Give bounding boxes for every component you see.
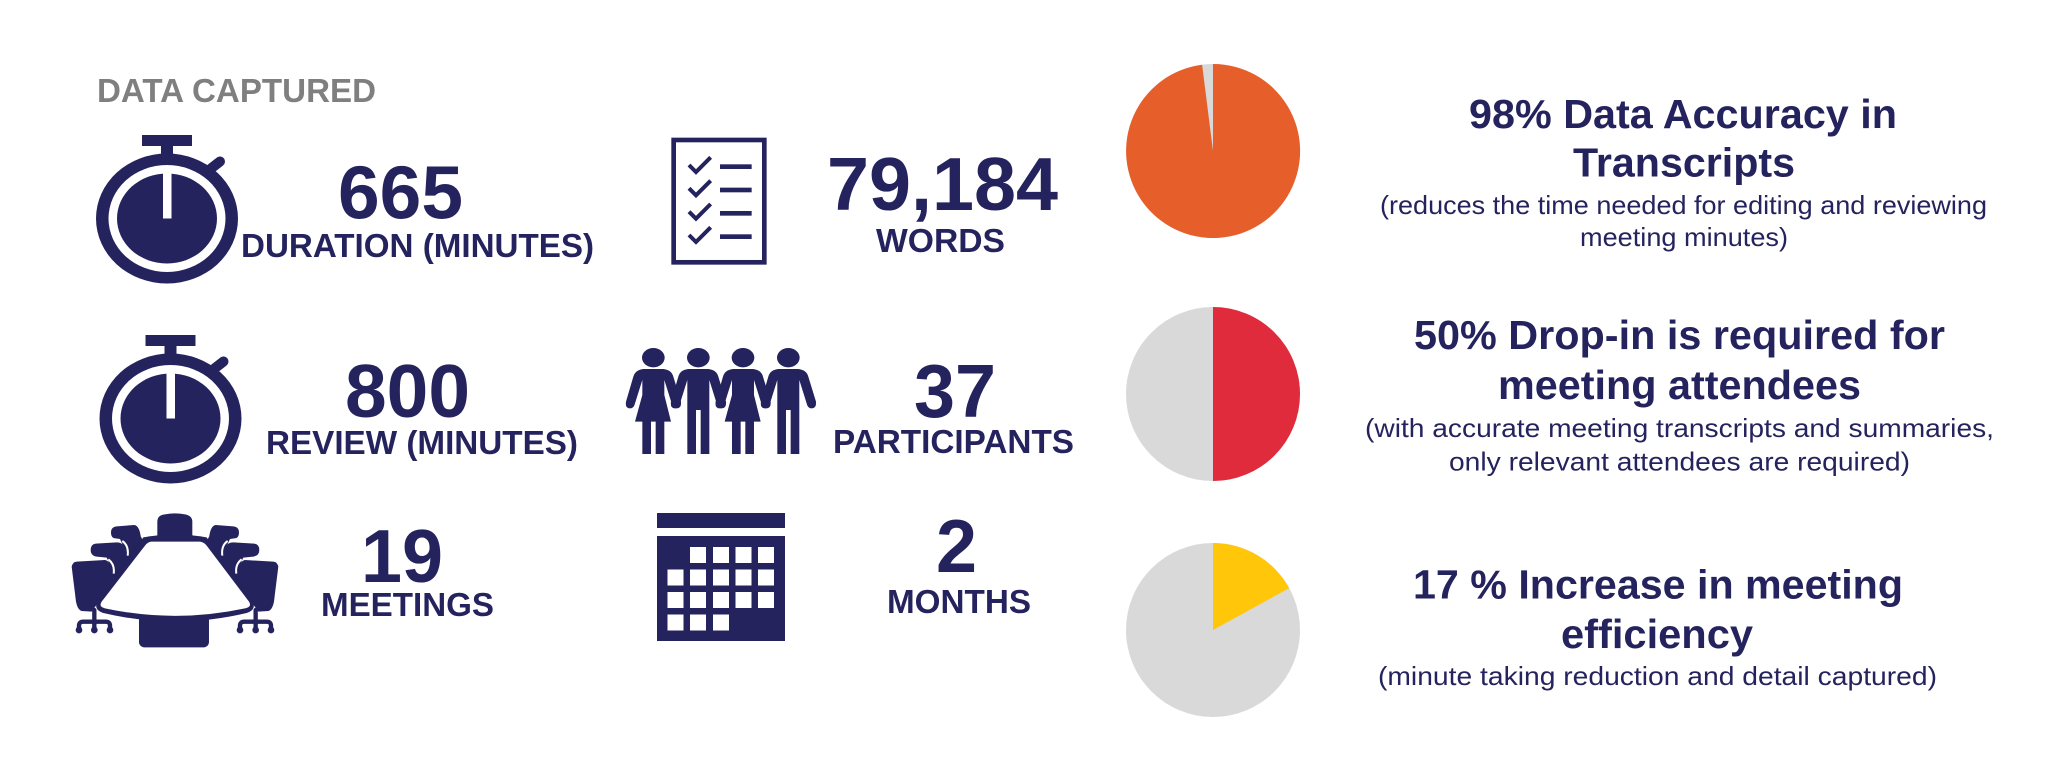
callout: 50% drop-in — [1365, 312, 1994, 476]
stat: 79,184: 79,184 — [827, 142, 1058, 226]
callout: 50% drop-in: only relevant attendees are required) — [1449, 446, 1910, 476]
stat: 665: 665 — [338, 150, 463, 234]
callout: 50% drop-in: (with accurate meeting transcripts and summaries, — [1365, 413, 1994, 443]
label: meetings: MEETINGS — [321, 586, 494, 623]
stat: 2: 2 — [936, 504, 977, 588]
icon: stopwatch duration — [96, 135, 238, 284]
icon: stopwatch review — [100, 335, 242, 484]
callout: 17% efficiency: 17 % Increase in meeting — [1413, 562, 1903, 608]
callout: 17% efficiency: (minute taking reduction and detail captured) — [1378, 661, 1937, 691]
icon: calendar — [657, 513, 785, 641]
icon: checklist — [674, 140, 764, 262]
pie: 98% accuracy — [1126, 64, 1300, 238]
stat: 19: 19 — [361, 514, 443, 598]
pie: 17% efficiency — [1126, 543, 1300, 717]
callout: 98% accuracy: Transcripts — [1573, 140, 1795, 186]
callout: 98% accuracy: meeting minutes) — [1580, 222, 1788, 252]
label: review: REVIEW (MINUTES) — [266, 424, 578, 461]
label: participants: PARTICIPANTS — [833, 423, 1074, 460]
heading: data captured: DATA CAPTURED — [97, 72, 376, 109]
callout: 98% accuracy: 98% Data Accuracy in — [1469, 91, 1897, 137]
icon: meeting table — [72, 513, 278, 647]
label: words: WORDS — [876, 222, 1005, 259]
icon: participants — [626, 348, 816, 454]
label: duration: DURATION (MINUTES) — [241, 227, 594, 264]
callout: 50% drop-in: meeting attendees — [1498, 362, 1861, 408]
label: months: MONTHS — [887, 583, 1031, 620]
callout: 17% efficiency: efficiency — [1561, 611, 1753, 657]
callout: 17% efficiency — [1378, 562, 1937, 691]
callout: 98% accuracy: (reduces the time needed for editing and reviewing — [1380, 190, 1987, 220]
stat: 800: 800 — [345, 349, 470, 433]
callout: 50% drop-in: 50% Drop-in is required for — [1414, 312, 1945, 358]
pie: 50% drop-in — [1126, 307, 1300, 481]
callout: 98% accuracy — [1380, 91, 1987, 252]
stat: 37: 37 — [914, 349, 996, 433]
